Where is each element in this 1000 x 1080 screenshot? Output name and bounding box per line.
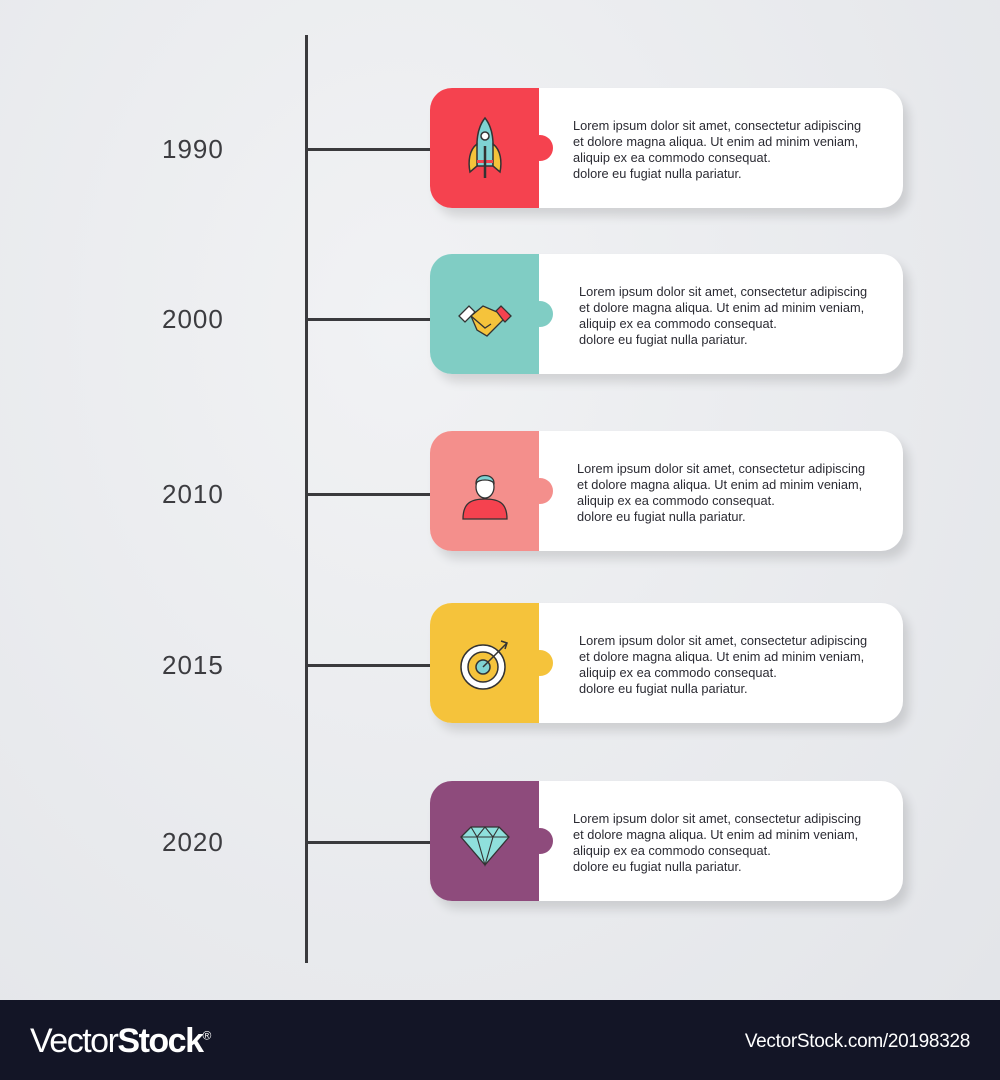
year 1990: 1990 [162,134,224,164]
card: 1990: Lorem ipsum dolor sit amet, consectetur adipiscing [573,118,861,133]
card: 2015: Lorem ipsum dolor sit amet, consectetur adipiscing [579,633,867,648]
footer watermark bar: VectorStock.com/20198328 [745,1031,970,1052]
card: 1990: et dolore magna aliqua. Ut enim ad minim veniam, [573,134,858,149]
card: 2020: dolore eu fugiat nulla pariatur. [573,859,742,874]
card: 2015: et dolore magna aliqua. Ut enim ad minim veniam, [579,649,864,664]
year 2015: 2015 [162,650,224,680]
card: 2010: dolore eu fugiat nulla pariatur. [577,509,746,524]
card: 1990: dolore eu fugiat nulla pariatur. [573,166,742,181]
timeline axis [305,35,308,963]
card: 2020: et dolore magna aliqua. Ut enim ad minim veniam, [573,827,858,842]
card: 2015: aliquip ex ea commodo consequat. [579,665,777,680]
icon: handshake [458,305,512,337]
card: 2020: aliquip ex ea commodo consequat. [573,843,771,858]
card: 2000: Lorem ipsum dolor sit amet, consectetur adipiscing [579,284,867,299]
footer watermark bar: VectorStock® [30,1022,210,1060]
card: 1990 [430,88,903,208]
year 2000: 2000 [162,304,224,334]
card: 2000 [430,254,903,374]
icon: target [460,640,508,690]
card: 2000: et dolore magna aliqua. Ut enim ad minim veniam, [579,300,864,315]
card: 2015: dolore eu fugiat nulla pariatur. [579,681,748,696]
card: 2010: Lorem ipsum dolor sit amet, consectetur adipiscing [577,461,865,476]
icon: person [462,474,508,520]
icon: diamond [460,826,510,867]
year 2020: 2020 [162,827,224,857]
icon: rocket [468,116,502,178]
year 2010: 2010 [162,479,224,509]
card: 2000: aliquip ex ea commodo consequat. [579,316,777,331]
card: 2010: et dolore magna aliqua. Ut enim ad minim veniam, [577,477,862,492]
card: 2015 [430,603,903,723]
card: 2020: Lorem ipsum dolor sit amet, consectetur adipiscing [573,811,861,826]
card: 1990: aliquip ex ea commodo consequat. [573,150,771,165]
card: 2010 [430,431,903,551]
card: 2000: dolore eu fugiat nulla pariatur. [579,332,748,347]
card: 2010: aliquip ex ea commodo consequat. [577,493,775,508]
footer watermark bar [0,1000,1000,1080]
card: 2020 [430,781,903,901]
